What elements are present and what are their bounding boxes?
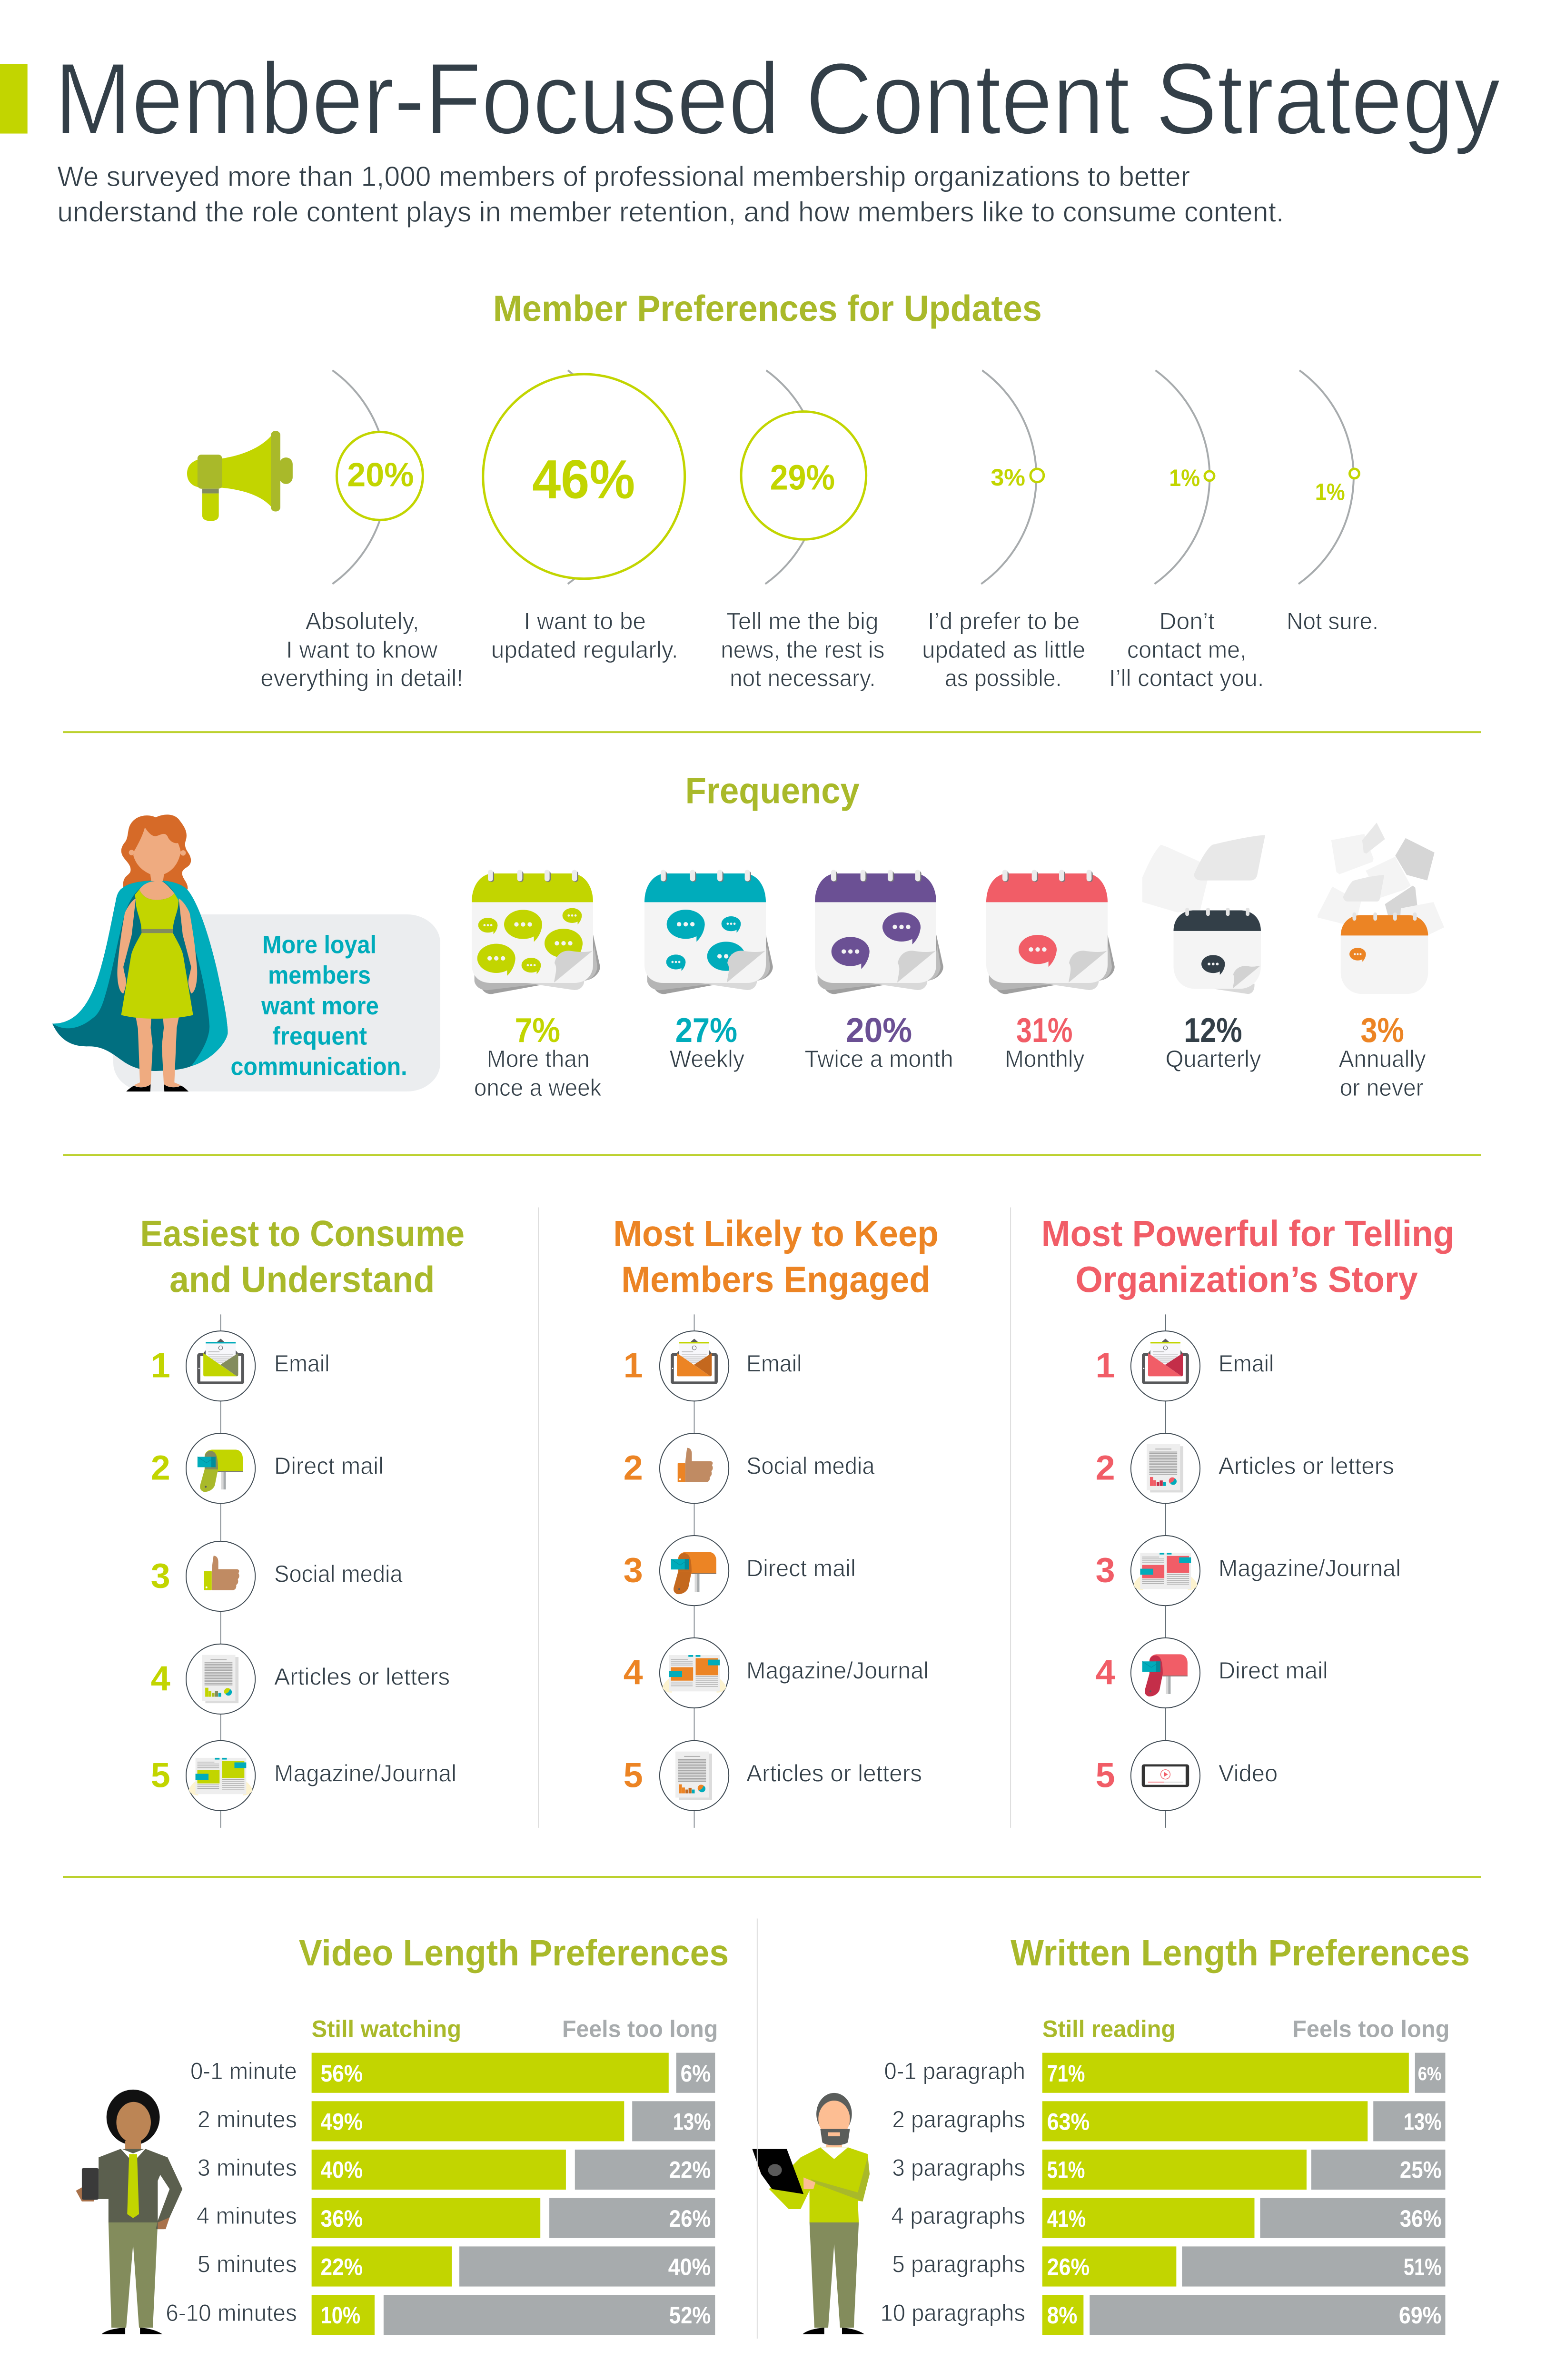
frequency percentages xyxy=(515,1011,1404,1050)
preference labels: updated regularly. xyxy=(491,636,678,663)
chart: written length bars: 71% xyxy=(1047,2060,1085,2087)
chart: written length bars: 69% xyxy=(1399,2302,1441,2329)
item 1: email: 1 xyxy=(1096,1346,1115,1385)
chart: arcs and circles: 20% xyxy=(347,456,414,494)
chart: written length bars: 10 paragraphs xyxy=(881,2300,1025,2326)
section: channel rankings xyxy=(140,1208,1454,1828)
heading: member preferences for updates: Member Preferences for Updates xyxy=(493,289,1042,329)
item 3: direct mail xyxy=(624,1536,856,1606)
chart: video length bars: 22% xyxy=(321,2254,363,2281)
frequency percentages: 31% xyxy=(1016,1011,1072,1050)
callout text: communication. xyxy=(231,1052,407,1081)
frequency labels: or never xyxy=(1340,1074,1424,1101)
item 1: email xyxy=(624,1331,802,1401)
item 4: direct mail: 4 xyxy=(1096,1652,1115,1692)
heading: most likely to keep members engaged xyxy=(613,1214,939,1300)
callout text: frequent xyxy=(272,1022,367,1051)
frequency labels xyxy=(474,1046,1426,1101)
item 3: social media: Social media xyxy=(274,1560,403,1587)
heading: most powerful for telling organization's story: Most Powerful for Telling xyxy=(1041,1214,1454,1254)
item 4: direct mail xyxy=(1096,1638,1328,1708)
chart: written length bars: 51% xyxy=(1047,2157,1085,2183)
icon: calendar twice a month xyxy=(815,870,943,994)
item 4: magazine/journal: Magazine/Journal xyxy=(746,1657,929,1684)
chart: written length bars: 25% xyxy=(1400,2157,1441,2183)
chart: written length bars: Still reading xyxy=(1042,2015,1175,2042)
item 4: articles or letters: 4 xyxy=(151,1658,170,1698)
frequency percentages: 7% xyxy=(515,1011,560,1050)
item 4: articles or letters: Articles or letters xyxy=(274,1663,450,1690)
chart: video length bars: 40% xyxy=(668,2254,711,2281)
frequency percentages: 27% xyxy=(675,1011,737,1050)
preference labels: news, the rest is xyxy=(721,636,884,663)
item 2: articles or letters: Articles or letters xyxy=(1219,1453,1394,1479)
chart: video length bars: 6-10 minutes xyxy=(166,2300,297,2326)
icon: megaphone xyxy=(187,431,293,521)
frequency percentages: 20% xyxy=(846,1011,912,1050)
panel: easiest to consume xyxy=(140,1214,465,1828)
item 1: email xyxy=(151,1331,329,1401)
chart: written length bars: 0-1 paragraph xyxy=(884,2058,1025,2084)
chart: video length bars: 56% xyxy=(321,2060,363,2087)
icon: calendar more than once a week xyxy=(472,870,600,994)
chart: arcs and circles: 1% xyxy=(1169,465,1200,491)
chart: video length bars: 5 minutes xyxy=(198,2251,297,2278)
chart: video length bars: Feels too long xyxy=(562,2015,718,2042)
item 5: video: Video xyxy=(1219,1760,1278,1786)
item 2: direct mail: Direct mail xyxy=(274,1453,384,1479)
chart: video length bars: 26% xyxy=(669,2205,711,2232)
icon: calendar monthly xyxy=(986,870,1115,994)
item 2: social media: 2 xyxy=(624,1448,643,1488)
illustration: man with phone xyxy=(76,2090,182,2334)
item 5: articles or letters: Articles or letters xyxy=(746,1760,922,1786)
preference labels: Don’t xyxy=(1160,608,1215,635)
item 2: direct mail: 2 xyxy=(151,1448,170,1488)
preference labels: I’d prefer to be xyxy=(928,608,1080,635)
intro text: We surveyed more than 1,000 members of professional membership organizations to better xyxy=(57,160,1190,192)
title accent bar xyxy=(0,64,28,134)
chart: video length bars: 40% xyxy=(321,2157,363,2183)
icon: calendar annually or never with torn sheets xyxy=(1318,823,1444,994)
chart: written length bars: 4 paragraphs xyxy=(891,2202,1025,2229)
chart: video length bars: 10% xyxy=(321,2302,360,2329)
chart: video length bars: 49% xyxy=(321,2108,363,2135)
item 5: articles or letters: 5 xyxy=(624,1755,643,1795)
chart: video length bars xyxy=(166,2015,718,2335)
item 3: direct mail: Direct mail xyxy=(746,1555,856,1582)
chart: video length bars: 0-1 minute xyxy=(190,2058,297,2084)
chart: written length bars: 3 paragraphs xyxy=(892,2154,1025,2181)
chart: written length bars: 6% xyxy=(1418,2063,1441,2084)
section: length preferences xyxy=(63,1919,1481,2380)
item 3: social media xyxy=(151,1541,403,1611)
heading: frequency: Frequency xyxy=(685,771,860,811)
heading: video length preferences: Video Length Preferences xyxy=(299,1933,729,1973)
section: header and member preferences xyxy=(0,42,1500,733)
preference labels: I want to be xyxy=(524,608,646,635)
preference labels: Tell me the big xyxy=(726,608,879,635)
chart: video length bars: 6% xyxy=(681,2060,711,2087)
chart: arcs and circles xyxy=(332,370,1359,584)
item 4: articles or letters xyxy=(151,1644,450,1714)
preference labels: everything in detail! xyxy=(260,665,463,692)
heading: most powerful for telling organization's story: Organization’s Story xyxy=(1075,1260,1418,1300)
chart: arcs and circles: 46% xyxy=(532,449,635,510)
panel: loyal members callout background xyxy=(113,914,440,1091)
chart: arcs and circles: 29% xyxy=(770,457,835,497)
frequency labels: Annually xyxy=(1339,1046,1426,1072)
preference labels: Not sure. xyxy=(1287,608,1378,635)
chart: video length bars: 13% xyxy=(673,2108,711,2135)
item 5: magazine/journal: Magazine/Journal xyxy=(274,1760,456,1786)
item 2: social media xyxy=(624,1433,875,1503)
preference labels: Absolutely, xyxy=(306,608,419,635)
item 2: direct mail xyxy=(151,1433,384,1503)
chart: written length bars: 26% xyxy=(1047,2254,1090,2281)
item 1: email: Email xyxy=(746,1350,802,1377)
item 5: articles or letters xyxy=(624,1741,922,1811)
callout text: More loyal xyxy=(262,931,377,959)
heading: most powerful for telling organization's story xyxy=(1041,1214,1454,1300)
chart: written length bars: 8% xyxy=(1047,2302,1077,2329)
heading: written length preferences: Written Length Preferences xyxy=(1011,1933,1470,1973)
item 1: email: Email xyxy=(274,1350,329,1377)
item 4: magazine/journal xyxy=(624,1638,929,1708)
heading: most likely to keep members engaged: Members Engaged xyxy=(621,1260,931,1300)
frequency labels: Twice a month xyxy=(804,1046,953,1072)
heading: easiest to consume and understand: Easiest to Consume xyxy=(140,1214,465,1254)
icon: calendar quarterly with torn sheets xyxy=(1142,835,1265,994)
chart: written length bars xyxy=(881,2015,1449,2335)
callout text: want more xyxy=(261,992,379,1020)
intro text xyxy=(57,160,1284,228)
frequency labels: More than xyxy=(487,1046,590,1072)
chart: written length bars: 36% xyxy=(1400,2205,1441,2232)
item 3: magazine/journal xyxy=(1096,1536,1401,1606)
frequency labels: Weekly xyxy=(670,1046,744,1072)
intro text: understand the role content plays in member retention, and how members like to consume content. xyxy=(57,196,1284,228)
callout text: members xyxy=(268,961,371,989)
chart: written length bars: 2 paragraphs xyxy=(892,2106,1025,2132)
chart: written length bars: 63% xyxy=(1047,2108,1090,2135)
chart: written length bars: 41% xyxy=(1047,2205,1086,2232)
frequency labels: Monthly xyxy=(1005,1046,1084,1072)
preference labels: updated as little xyxy=(922,636,1085,663)
chart: video length bars: Still watching xyxy=(312,2015,461,2042)
item 5: magazine/journal xyxy=(151,1741,456,1811)
chart: video length bars: 4 minutes xyxy=(197,2202,297,2229)
item 3: social media: 3 xyxy=(151,1556,170,1595)
item 1: email: Email xyxy=(1219,1350,1274,1377)
chart: written length bars: 51% xyxy=(1404,2254,1441,2281)
frequency labels: Quarterly xyxy=(1165,1046,1261,1072)
heading: easiest to consume and understand: and Understand xyxy=(169,1260,435,1300)
preference labels: I want to know xyxy=(286,636,438,663)
frequency percentages: 3% xyxy=(1360,1011,1404,1050)
item 4: magazine/journal: 4 xyxy=(624,1652,643,1692)
frequency labels: once a week xyxy=(474,1074,602,1101)
item 3: direct mail: 3 xyxy=(624,1550,643,1589)
illustration: woman in cape xyxy=(52,814,228,1091)
item 1: email: 1 xyxy=(151,1346,170,1385)
chart: written length bars: 13% xyxy=(1404,2108,1441,2135)
chart: video length bars: 52% xyxy=(669,2302,711,2329)
preference labels: contact me, xyxy=(1127,636,1247,663)
panel: most powerful for telling organization's story xyxy=(1041,1214,1454,1828)
section: frequency xyxy=(63,771,1481,1156)
item 2: articles or letters xyxy=(1096,1433,1394,1503)
item 4: direct mail: Direct mail xyxy=(1219,1657,1328,1684)
item 5: magazine/journal: 5 xyxy=(151,1755,170,1795)
panel: most likely to keep members engaged xyxy=(613,1214,939,1828)
item 2: social media: Social media xyxy=(746,1453,875,1479)
illustration: man with tablet xyxy=(752,2093,870,2334)
preference labels xyxy=(260,608,1378,692)
preference labels: I’ll contact you. xyxy=(1109,665,1264,692)
preference labels: as possible. xyxy=(945,665,1062,692)
item 5: video xyxy=(1096,1741,1278,1811)
item 2: articles or letters: 2 xyxy=(1096,1448,1115,1488)
preference labels: not necessary. xyxy=(730,665,876,692)
heading: most likely to keep members engaged: Most Likely to Keep xyxy=(613,1214,939,1254)
item 3: magazine/journal: Magazine/Journal xyxy=(1219,1555,1401,1582)
item 5: video: 5 xyxy=(1096,1755,1115,1795)
chart: video length bars: 36% xyxy=(321,2205,363,2232)
callout text xyxy=(231,931,407,1081)
chart: written length bars: 5 paragraphs xyxy=(892,2251,1025,2278)
chart: video length bars: 2 minutes xyxy=(198,2106,297,2132)
frequency percentages: 12% xyxy=(1184,1011,1242,1050)
chart: video length bars: 3 minutes xyxy=(198,2154,297,2181)
icon: calendar weekly xyxy=(644,870,773,994)
item 1: email: 1 xyxy=(624,1346,643,1385)
item 3: magazine/journal: 3 xyxy=(1096,1550,1115,1589)
heading: easiest to consume and understand xyxy=(140,1214,465,1300)
chart: arcs and circles: 1% xyxy=(1315,479,1345,506)
chart: arcs and circles: 3% xyxy=(991,464,1025,491)
chart: written length bars: Feels too long xyxy=(1292,2015,1449,2042)
chart: video length bars: 22% xyxy=(669,2157,711,2183)
item 1: email xyxy=(1096,1331,1274,1401)
